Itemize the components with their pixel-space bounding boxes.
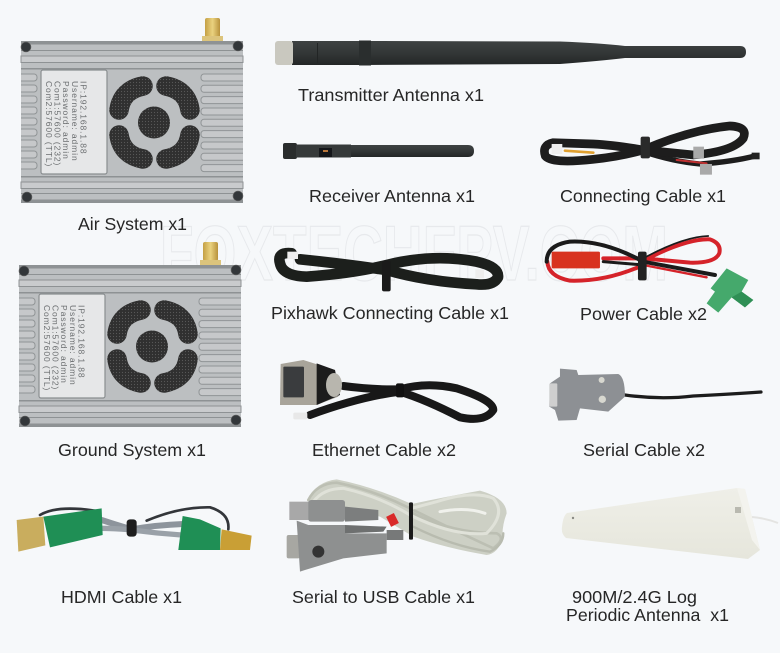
device: air system — [12, 18, 251, 203]
LCD label: Password: admin — [59, 305, 69, 384]
usb plugs — [289, 500, 378, 522]
label: receiver antenna: Receiver Antenna x1 — [309, 186, 475, 206]
label: pixhawk connecting cable: Pixhawk Connecting Cable x1 — [271, 303, 509, 323]
LCD label: Username: admin — [70, 81, 80, 162]
LCD label: IP:192.168.1.88 — [78, 81, 88, 155]
label: serial cable: Serial Cable x2 — [583, 440, 705, 460]
label: hdmi cable: HDMI Cable x1 — [61, 587, 182, 607]
transmitter antenna — [275, 40, 746, 66]
LCD label: Com2:57600 (TTL) — [42, 305, 52, 391]
serial cable — [549, 369, 761, 421]
serial to usb cable — [287, 479, 507, 572]
aluminium housing — [10, 265, 249, 427]
label: connecting cable: Connecting Cable x1 — [560, 186, 726, 206]
LCD label: Com1:57600 (232) — [52, 81, 62, 166]
green adapter board left — [43, 508, 103, 547]
pixhawk connecting cable — [279, 252, 498, 291]
micro hdmi plug — [220, 529, 252, 550]
hdmi plug — [17, 517, 45, 552]
db9 connector — [287, 521, 403, 572]
aluminium housing — [12, 41, 251, 203]
LCD label: Password: admin — [61, 81, 71, 160]
label: serial to usb cable: Serial to USB Cable x1 — [292, 587, 475, 607]
label: antenna line 1: 900M/2.4G Log — [572, 587, 697, 607]
coil silhouette — [308, 479, 507, 555]
LCD label: Username: admin — [68, 305, 78, 386]
label: power cable: Power Cable x2 — [580, 304, 707, 324]
green adapter board right — [178, 516, 221, 550]
receiver antenna — [283, 143, 474, 159]
LCD label — [39, 294, 105, 398]
label: air system: Air System x1 — [78, 214, 187, 234]
LCD label — [41, 70, 107, 174]
LCD label: Com2:57600 (TTL) — [44, 81, 54, 167]
speaker grille — [117, 310, 188, 383]
icon: SMA connector — [202, 18, 223, 41]
ethernet cable — [280, 360, 493, 419]
label: antenna line 2: Periodic Antenna x1 — [566, 605, 729, 625]
label: ethernet cable: Ethernet Cable x2 — [312, 440, 456, 460]
screws — [19, 265, 241, 426]
icon: SMA connector — [200, 242, 221, 265]
LCD label: IP:192.168.1.88 — [76, 305, 86, 379]
label: ground system: Ground System x1 — [58, 440, 206, 460]
green terminal block — [707, 268, 753, 313]
device: ground system — [10, 242, 249, 427]
screws — [21, 41, 243, 202]
power cable — [547, 236, 753, 313]
LCD label: Com1:57600 (232) — [50, 305, 60, 390]
hdmi cable — [17, 507, 252, 552]
label: transmitter antenna: Transmitter Antenna x1 — [298, 85, 484, 105]
speaker grille — [119, 86, 190, 159]
log periodic antenna — [562, 488, 778, 559]
connecting cable — [544, 126, 760, 175]
